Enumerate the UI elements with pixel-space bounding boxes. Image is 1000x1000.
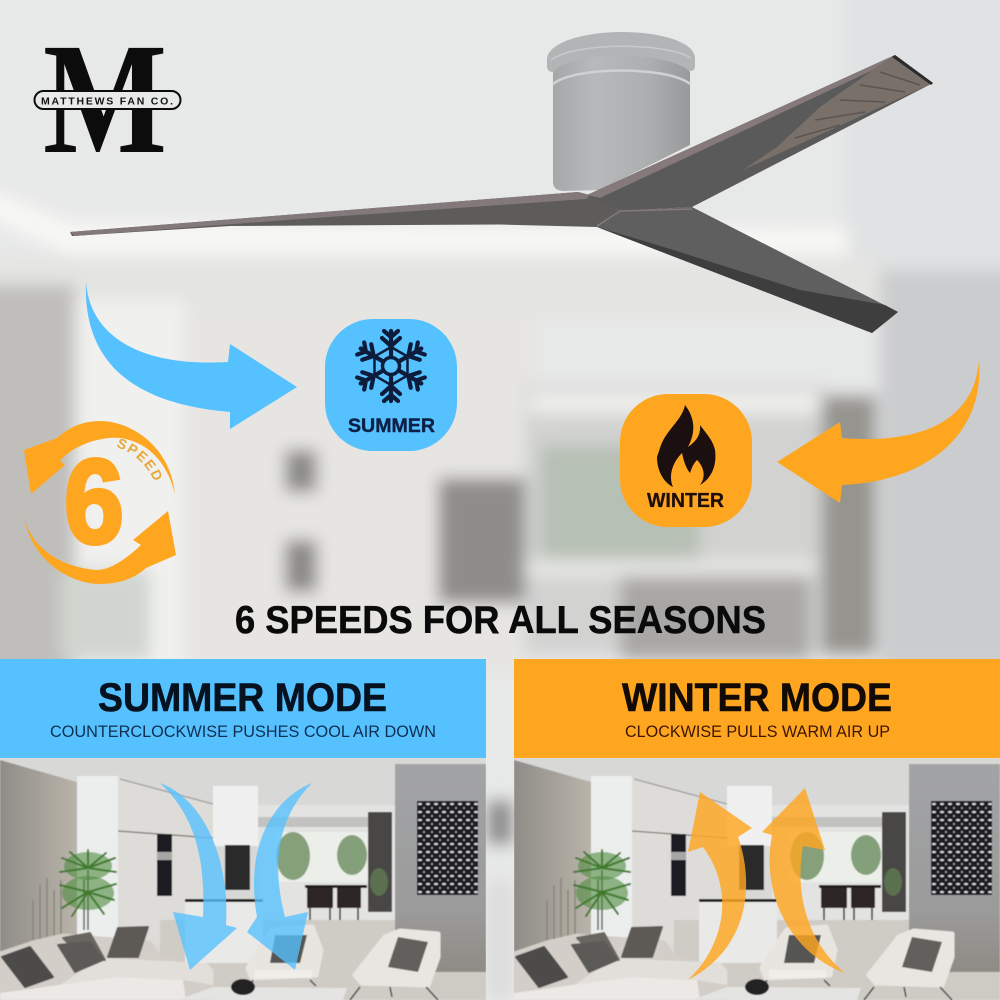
arrow: summer xyxy=(86,281,297,429)
panel: summer mode banner: SUMMER MODE xyxy=(98,676,387,720)
teapot xyxy=(231,979,255,995)
armchair xyxy=(248,927,321,986)
arrow: winter xyxy=(777,360,979,503)
panel: summer mode banner xyxy=(0,659,486,758)
coffee table xyxy=(178,987,347,1000)
icon: 6 speed: 6 xyxy=(64,435,124,569)
icon: 6 speed: SPEED xyxy=(117,439,162,480)
panel: winter mode banner: CLOCKWISE PULLS WARM AIR UP xyxy=(625,723,890,741)
panel: summer mode banner: COUNTERCLOCKWISE PUSHES COOL AIR DOWN xyxy=(50,723,436,741)
air arrows: warm air up xyxy=(688,788,845,980)
armchair xyxy=(350,931,438,1000)
badge: winter: WINTER xyxy=(647,490,725,512)
icon: snowflake xyxy=(356,331,426,401)
left blade xyxy=(70,192,620,236)
lower blade xyxy=(597,207,898,333)
panel: winter mode banner xyxy=(514,659,1000,758)
logo: Matthews Fan Co.: M xyxy=(43,11,167,187)
fan motor housing xyxy=(547,32,695,191)
panel: winter mode banner: WINTER MODE xyxy=(622,676,892,720)
plant xyxy=(60,850,116,930)
photo: living room, summer xyxy=(0,758,486,1000)
badge: summer xyxy=(325,319,457,451)
badge: winter xyxy=(620,394,752,527)
air arrows: cool air down xyxy=(160,783,312,970)
photo: living room, winter xyxy=(514,758,1000,1000)
logo: Matthews Fan Co.: MATTHEWS FAN CO. xyxy=(41,96,173,108)
badge: summer: SUMMER xyxy=(348,415,435,437)
icon: 6 speed xyxy=(24,421,176,584)
sofa xyxy=(0,927,213,1000)
icon: flame xyxy=(657,405,715,487)
wall art panel xyxy=(417,801,478,895)
title: 6 SPEEDS FOR ALL SEASONS xyxy=(235,599,766,642)
ceiling fan xyxy=(70,32,933,333)
right blade xyxy=(587,55,933,211)
